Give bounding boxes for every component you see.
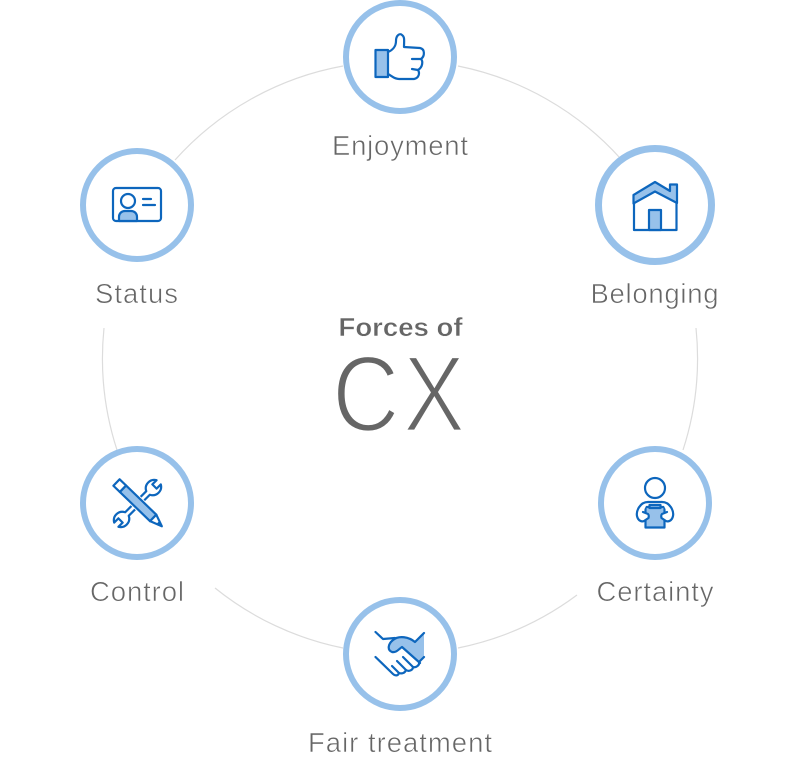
heading: Forces of: Forces of [338, 312, 463, 342]
label: Control: Control [90, 576, 184, 607]
center title [332, 312, 465, 455]
connecting circle arcs [102, 66, 698, 648]
label: Fair treatment: Fair treatment [308, 727, 492, 758]
node: Control [83, 449, 191, 607]
icon: ID card [113, 188, 161, 221]
heading: CX: CX [332, 334, 465, 455]
icon: pencil and wrench [111, 477, 165, 530]
node: Status [83, 151, 191, 309]
node: Fair treatment [308, 600, 492, 758]
node: Certainty [596, 449, 714, 607]
label: Status: Status [95, 278, 178, 309]
node: Belonging [590, 148, 718, 309]
label: Belonging: Belonging [590, 278, 718, 309]
label: Certainty: Certainty [596, 576, 714, 607]
pencil [113, 479, 165, 530]
icon: thumbs up [376, 34, 424, 79]
label: Enjoyment: Enjoyment [332, 130, 468, 161]
icon: person with clipboard [637, 478, 673, 528]
icon: house [634, 182, 677, 230]
node: Enjoyment [332, 3, 468, 161]
icon: handshake [376, 632, 424, 675]
wrench [111, 477, 164, 530]
